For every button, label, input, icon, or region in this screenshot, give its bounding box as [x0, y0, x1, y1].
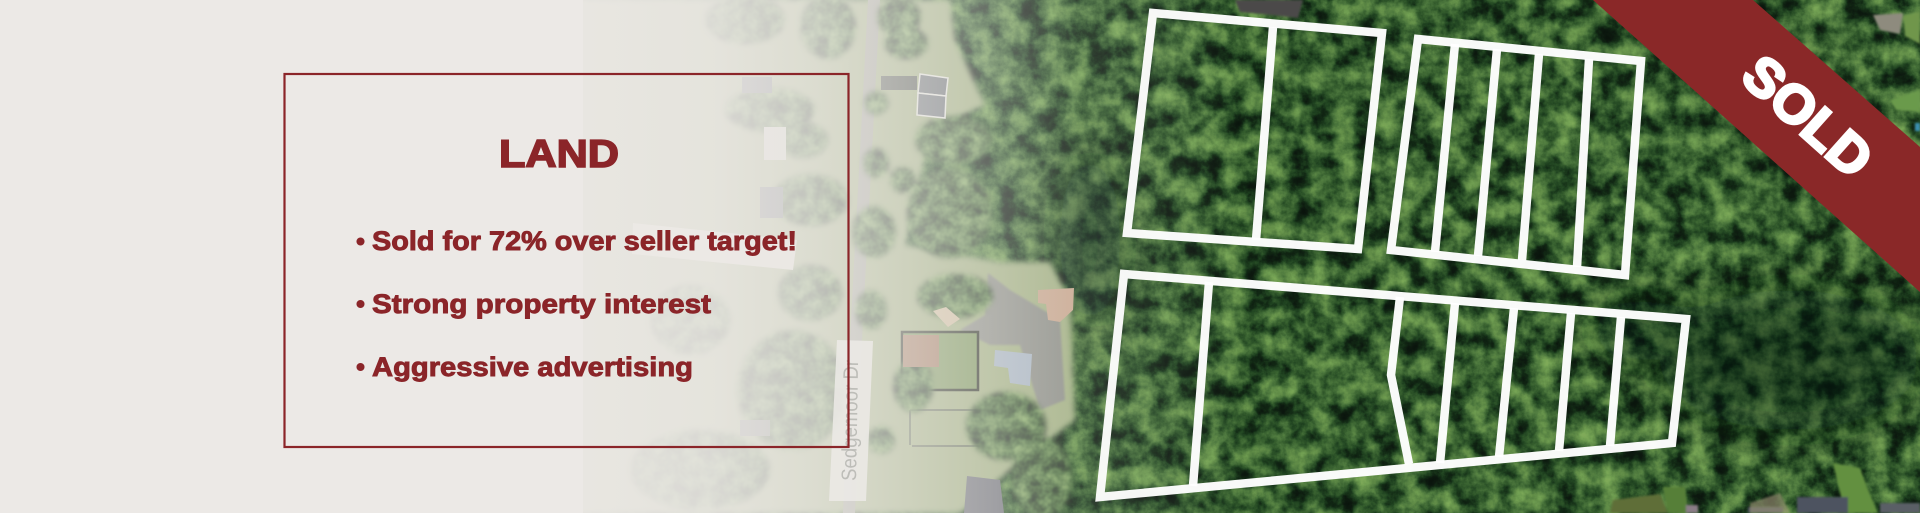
suburban lawns [0, 0, 1075, 513]
bullet 1: Sold for 72% over seller target! [372, 226, 797, 256]
map label strip [632, 223, 797, 270]
trees around houses [630, 0, 1072, 513]
bullet 2: Strong property interest [372, 289, 711, 319]
bullet 3: Aggressive advertising [372, 352, 693, 382]
house: tan roof [1038, 288, 1074, 322]
top house behind the parcels [1235, 0, 1303, 18]
street label: Sedgemoor Dr [829, 340, 873, 501]
bottom right neighbourhood [1610, 463, 1920, 513]
bullet list [357, 226, 797, 382]
driveway and yard [960, 273, 1065, 410]
text panel frame [284, 74, 848, 447]
street label: Sedgemoor Dr: Sedgemoor Dr [838, 360, 863, 481]
heading: LAND: LAND [499, 133, 619, 176]
fade panel over the photo [0, 0, 1283, 513]
road [850, 0, 880, 340]
parcel group: upper left [1127, 13, 1382, 249]
house: upper grey roof [881, 74, 948, 118]
tan house in fenced yard [903, 335, 939, 367]
parcel group: bottom [1100, 274, 1686, 497]
left faint houses [740, 77, 786, 436]
parcel group: upper right [1391, 39, 1641, 275]
SOLD corner banner [1593, 0, 1920, 292]
banner label: SOLD [1731, 44, 1884, 190]
fenced yard [902, 332, 978, 390]
top right yards [1873, 11, 1920, 131]
blue grey roof [994, 350, 1032, 386]
bottom grey house [964, 476, 1004, 513]
tan shed [933, 307, 960, 327]
yard fences [910, 410, 1000, 446]
land parcel outlines [1100, 13, 1686, 497]
dark forest shading [1060, 150, 1920, 430]
